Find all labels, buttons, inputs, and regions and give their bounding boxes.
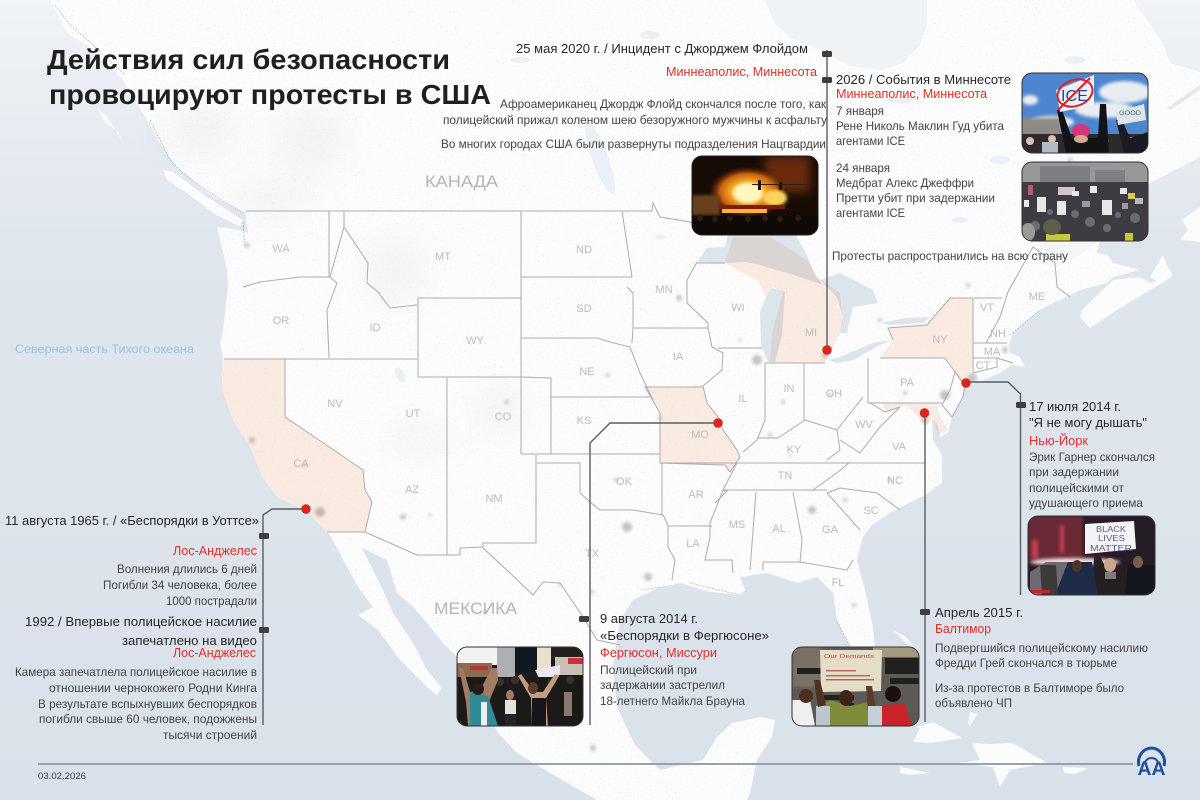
text block: Los Angeles 1992: отношении чернокожего Родни Кинга <box>49 681 257 695</box>
text block: Ferguson 2014: Фергюсон, Миссури <box>600 646 717 660</box>
text block: Minnesota 2026: 24 января <box>836 161 890 175</box>
map: state abbreviations: UT <box>406 408 421 420</box>
map: state abbreviations: IN <box>784 383 795 395</box>
map: water labels and country names <box>15 172 518 618</box>
map: state abbreviations: VT <box>980 302 994 314</box>
island: Jamaica <box>900 767 930 775</box>
icon: Anadolu Agency logo <box>1138 748 1166 780</box>
title <box>47 44 491 110</box>
map: state abbreviations: GA <box>822 524 839 536</box>
map: coastline detail <box>55 5 1040 646</box>
text block: Minnesota 2026: Претти убит при задержании <box>836 191 995 205</box>
text block: George Floyd 2020: Афроамериканец Джордж Флойд скончался после того, как <box>500 97 827 111</box>
text block: Minnesota 2026: Медбрат Алекс Джеффри <box>836 176 974 190</box>
map: state abbreviations: WY <box>466 335 485 347</box>
text block: New York 2014: 17 июля 2014 г. <box>1029 399 1121 414</box>
text block: Minnesota 2026: Рене Николь Маклин Гуд убита <box>836 119 1004 133</box>
text block: Ferguson 2014: 9 августа 2014 г. <box>600 611 698 626</box>
text block: George Floyd 2020: Миннеаполис, Миннесота <box>666 65 817 79</box>
map: state abbreviations: VA <box>892 441 907 453</box>
text block: Los Angeles 1992: запечатлено на видео <box>122 633 257 648</box>
map: state abbreviations: IA <box>673 351 684 363</box>
map: state abbreviations <box>272 243 1045 589</box>
map: state abbreviations: TN <box>778 470 792 482</box>
map: state abbreviations: OR <box>273 315 289 327</box>
map: state abbreviations: MS <box>729 519 745 531</box>
label: Canada: КАНАДА <box>425 172 499 191</box>
map: state abbreviations: NE <box>579 366 595 378</box>
island: Cuba <box>913 722 962 743</box>
title: провоцируют протесты в США <box>49 79 491 110</box>
footer rule <box>38 763 1133 765</box>
text block: Minnesota 2026: агентами ICE <box>836 206 905 220</box>
island: Vancouver <box>163 170 243 227</box>
photo: anti-ICE protest: GOOD <box>1119 111 1142 117</box>
text block: Ferguson 2014: 18-летнего Майкла Брауна <box>600 694 745 708</box>
photo: anti-ICE protest <box>1022 73 1151 153</box>
text block: Los Angeles 1992: тысячи строений <box>163 728 257 742</box>
text block: Los Angeles 1992: 1992 / Впервые полицейское насилие <box>25 614 257 629</box>
map: state abbreviations: PA <box>900 377 915 389</box>
island: Hispaniola <box>958 743 1047 787</box>
photo: Black Lives Matter sign: LIVES <box>1098 533 1125 543</box>
text block: Los Angeles 1992: Камера запечатлела полицейское насилие в <box>15 665 257 679</box>
island: Bahamas <box>893 630 977 727</box>
map: state abbreviations: AZ <box>405 484 419 496</box>
text block: Los Angeles 1965: Волнения длились 6 дней <box>117 562 257 576</box>
state: New York <box>880 298 973 382</box>
map: state abbreviations: MN <box>655 284 673 296</box>
map: international and state borders <box>224 203 1070 645</box>
text block: New York 2014: "Я не могу дышать" <box>1029 415 1147 430</box>
map: state abbreviations: MA <box>984 346 1001 358</box>
map: state abbreviations: AL <box>772 523 786 535</box>
map: state abbreviations: MO <box>691 429 709 441</box>
text block: Minnesota 2026: 7 января <box>836 104 884 118</box>
map: state abbreviations: CA <box>293 458 309 470</box>
text block: New York 2014: Эрик Гарнер скончался <box>1029 450 1155 464</box>
photo: Black Lives Matter sign <box>1028 516 1155 595</box>
map: highlighted states <box>222 237 973 532</box>
text block: Baltimore 2015: Балтимор <box>935 622 991 636</box>
text block: Baltimore 2015: Апрель 2015 г. <box>935 605 1023 620</box>
state: Michigan <box>725 237 843 363</box>
state: Missouri <box>645 386 740 472</box>
map: state abbreviations: KY <box>787 444 802 456</box>
text block: Los Angeles 1965: Погибли 34 человека, более <box>103 578 257 592</box>
map: state abbreviations: SD <box>576 303 592 315</box>
text block: Baltimore 2015: Фредди Грей скончался в тюрьме <box>935 656 1117 670</box>
map: state abbreviations: NM <box>485 493 503 505</box>
text block: Baltimore 2015 <box>935 605 1148 710</box>
map: state abbreviations: ME <box>1029 291 1045 303</box>
text block: Baltimore 2015: Подвергшийся полицейскому насилию <box>935 641 1148 655</box>
text block: Ferguson 2014: задержании застрелил <box>600 678 725 692</box>
text block: Baltimore 2015: объявлено ЧП <box>935 696 1012 710</box>
island: Nova Scotia <box>1080 277 1172 328</box>
text block: Baltimore 2015: Из-за протестов в Балтиморе было <box>935 681 1124 695</box>
map: state abbreviations: OH <box>826 388 842 400</box>
text block: Ferguson 2014 <box>600 611 769 708</box>
text block: Minnesota 2026: Протесты распространились на всю страну <box>832 249 1068 263</box>
text block: George Floyd 2020: Во многих городах США были развернуты подразделения Нацгвардии <box>441 137 826 151</box>
timeline connector lines <box>263 50 1020 725</box>
map: state abbreviations: MT <box>435 251 451 263</box>
text block: Los Angeles 1992 <box>15 614 257 742</box>
map: state abbreviations: IL <box>738 393 748 405</box>
photo: burning building Minneapolis <box>692 156 818 235</box>
map: state abbreviations: MI <box>805 327 817 339</box>
state: California <box>222 359 372 532</box>
icon: Anadolu Agency logo: AA <box>1138 759 1166 780</box>
photo: Black Lives Matter sign: BLACK <box>1096 524 1126 534</box>
photo: Ferguson crowd arms raised <box>457 647 583 726</box>
map: state abbreviations: TX <box>585 548 600 560</box>
text block: Los Angeles 1992: В результате вспыхнувших беспорядков <box>38 697 257 711</box>
map: mountain and city shading <box>160 100 1072 751</box>
text block: Minnesota 2026: Миннеаполис, Миннесота <box>836 87 987 101</box>
text block: Los Angeles 1965 <box>5 513 259 608</box>
map: state abbreviations: ID <box>370 322 381 334</box>
photo: crowd with placards <box>1021 162 1148 241</box>
island: Anticosti channel land <box>1167 85 1200 110</box>
map: state abbreviations: WV <box>855 419 874 431</box>
text block: Minnesota 2026: агентами ICE <box>836 134 905 148</box>
photo: anti-ICE protest: ICE <box>1061 88 1088 105</box>
island: Cape Breton <box>1150 255 1173 283</box>
map: state abbreviations: AR <box>688 489 704 501</box>
island: Newfoundland <box>1180 207 1200 242</box>
state: Maryland <box>883 403 948 435</box>
text block: Los Angeles 1992: погибли свыше 60 человек, подожжены <box>39 712 257 726</box>
timeline markers <box>259 51 1026 633</box>
label: North Pacific: Северная часть Тихого океана <box>15 342 194 356</box>
map: state abbreviations: LA <box>686 538 700 550</box>
text block: Los Angeles 1992: Лос-Анджелес <box>173 646 256 660</box>
island: Haida Gwaii <box>97 107 123 142</box>
map: state abbreviations: NC <box>887 475 903 487</box>
text block: Minnesota 2026: 2026 / События в Миннесоте <box>836 72 1011 87</box>
text block: Los Angeles 1965: 11 августа 1965 г. / «Беспорядки в Уоттсе» <box>5 513 259 528</box>
text block: George Floyd 2020 <box>441 41 827 151</box>
map: inland lakes and rivers <box>393 0 1100 384</box>
photo: Baltimore protest sign <box>792 647 919 726</box>
text block: New York 2014: Нью-Йорк <box>1029 433 1089 448</box>
label: Mexico: МЕКСИКА <box>434 599 518 618</box>
text block: George Floyd 2020: 25 мая 2020 г. / Инцидент с Джорджем Флойдом <box>516 41 808 56</box>
map: state abbreviations: OK <box>616 476 633 488</box>
map: state abbreviations: WI <box>731 302 745 314</box>
text block: New York 2014 <box>1029 399 1155 510</box>
map: Great Lakes <box>697 225 930 363</box>
text block: New York 2014: удушающего приема <box>1029 496 1143 510</box>
island: Puerto Rico <box>1063 767 1088 774</box>
event location dots <box>302 346 970 513</box>
map: state abbreviations: WA <box>272 243 290 255</box>
text block: Minnesota 2026 <box>832 72 1068 263</box>
date: 03.02.2026 <box>38 771 86 781</box>
text block: New York 2014: при задержании <box>1029 465 1119 479</box>
map: state abbreviations: FL <box>832 577 844 589</box>
title: Действия сил безопасности <box>47 44 450 75</box>
map: state abbreviations: NY <box>932 334 948 346</box>
map: state abbreviations: SC <box>863 505 879 517</box>
map: state abbreviations: KS <box>577 415 591 427</box>
text block: George Floyd 2020: полицейский прижал коленом шею безоружного мужчины к асфальту <box>443 113 827 127</box>
text block: Los Angeles 1965: Лос-Анджелес <box>173 544 257 558</box>
photo: Baltimore protest sign: Our Demands <box>824 654 875 660</box>
map: state abbreviations: NV <box>327 398 343 410</box>
map: state abbreviations: CO <box>495 411 512 423</box>
map: state abbreviations: CT <box>976 360 991 372</box>
text block: Los Angeles 1965: 1000 пострадали <box>166 594 257 608</box>
map: state abbreviations: ND <box>576 244 592 256</box>
text block: Ferguson 2014: «Беспорядки в Фергюсоне» <box>600 628 769 643</box>
photo: Black Lives Matter sign: MATTER <box>1090 543 1132 553</box>
text block: New York 2014: полицейскими от <box>1029 481 1125 495</box>
map: state abbreviations: NH <box>990 328 1006 340</box>
text block: Ferguson 2014: Полицейский при <box>600 663 697 677</box>
